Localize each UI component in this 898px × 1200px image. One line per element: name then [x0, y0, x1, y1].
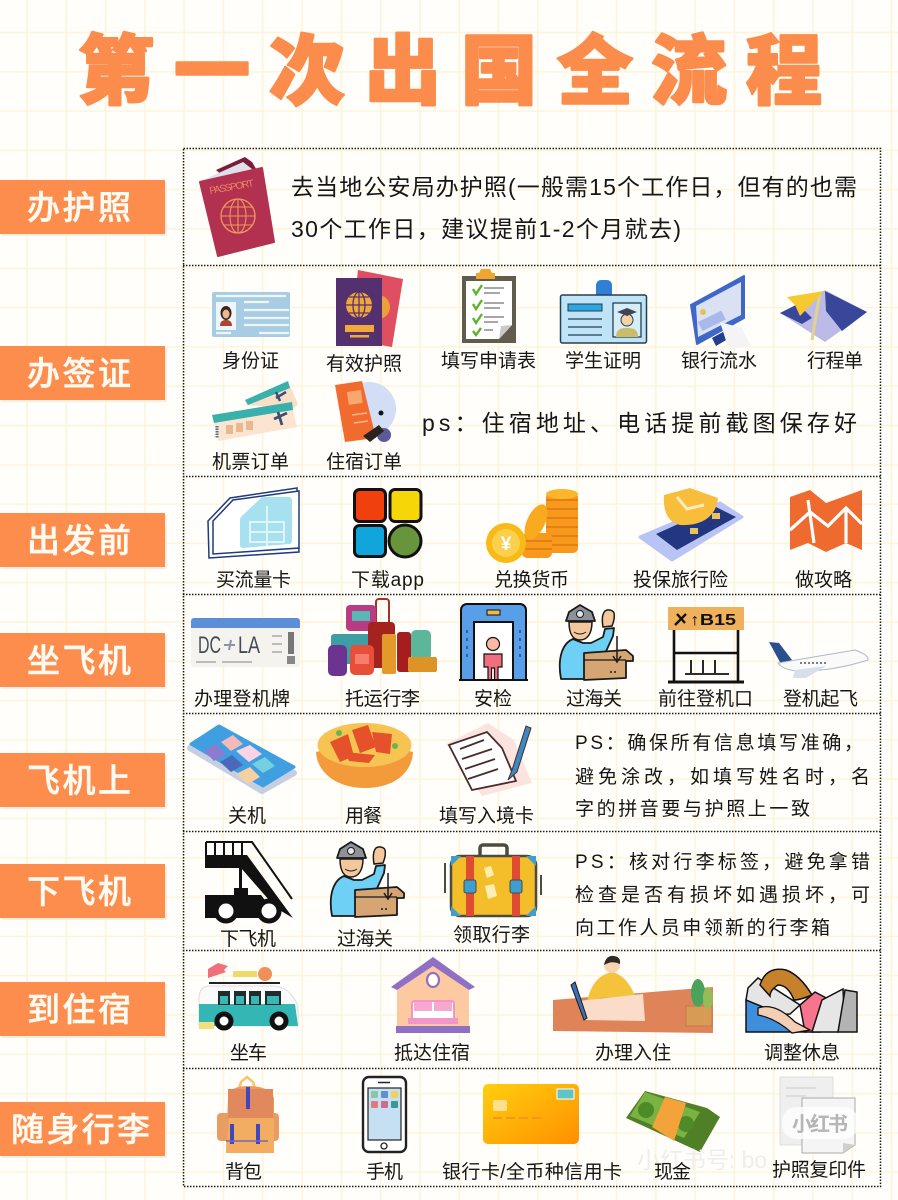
icon: flight tickets [212, 381, 298, 441]
text labels row six: 下飞机 [220, 928, 276, 950]
icon: meal bowl [316, 723, 413, 788]
text labels row four: 办理登机牌 [194, 688, 290, 710]
text labels row three: 下载app [351, 569, 424, 591]
text: PS note in-flight: 字的拼音要与护照上一致 [575, 798, 810, 820]
icon: bank statement monitor [691, 276, 750, 350]
text labels row seven: 调整休息 [764, 1042, 840, 1064]
text labels row eight: 背包 [225, 1161, 262, 1183]
text labels row three: 投保旅行险 [633, 569, 728, 591]
text: PS note in-flight: PS：确保所有信息填写准确， [575, 732, 863, 754]
label: 出发前 [0, 513, 167, 569]
label: 办护照 [0, 180, 167, 236]
label: 办签证: 办签证 [27, 355, 131, 392]
text: PS note in-flight [575, 732, 870, 820]
label: 下飞机: 下飞机 [27, 873, 131, 910]
label: 到住宿: 到住宿 [27, 991, 131, 1028]
label: 办护照: 办护照 [27, 189, 131, 226]
icon: backpack [217, 1077, 279, 1153]
panel frame: steps table [183, 148, 881, 1186]
panel: 出发前 [208, 488, 862, 591]
text labels row six [220, 924, 530, 950]
text labels row eight [225, 1159, 866, 1183]
icon: passport photocopies [780, 1077, 855, 1153]
icon: ID card [212, 292, 290, 337]
icon: coins: ¥ [501, 534, 512, 555]
panel: 办签证 [212, 269, 867, 473]
text labels row five: 填写入境卡 [439, 805, 534, 827]
icon: camper van [199, 963, 298, 1029]
text labels row four: 前往登机口 [658, 688, 753, 710]
panel: 飞机上 [190, 723, 870, 827]
text labels row one: 行程单 [807, 350, 863, 372]
text: ps note: ps：住宿地址、电话提前截图保存好 [422, 410, 857, 436]
label: 办签证 [0, 346, 167, 402]
icon: entry form [446, 723, 532, 796]
icon: bank card [483, 1084, 579, 1144]
icon: suitcase [445, 845, 541, 916]
text labels row six: 过海关 [337, 928, 393, 950]
icon: customs officer [560, 605, 633, 680]
text: PS note landing: PS：核对行李标签，避免拿错 [575, 850, 870, 873]
text labels row four [194, 688, 858, 710]
icon: checked luggage [328, 599, 437, 676]
icon: smartphone [363, 1077, 406, 1152]
text labels row eight: 手机 [366, 1161, 403, 1183]
text labels row five [228, 805, 534, 827]
text labels row four: 安检 [474, 688, 512, 710]
icon: valid passports [336, 270, 403, 347]
text: passport note: 去当地公安局办护照(一般需15个工作日，但有的也需 [291, 174, 857, 200]
icon: resting in bed [746, 969, 857, 1033]
panel: 随身行李 [217, 1077, 866, 1183]
label: 随身行李 [0, 1102, 167, 1158]
text labels row four: 托运行李 [345, 688, 420, 710]
icon: security gate [459, 604, 528, 680]
text labels row three: 买流量卡 [216, 569, 291, 591]
label: 下飞机 [0, 864, 167, 920]
icon: travel insurance [640, 488, 742, 560]
label: 出发前: 出发前 [27, 522, 131, 559]
icon: boarding pass: LA [238, 632, 260, 659]
label: 到住宿 [0, 982, 167, 1038]
icon: passport: PASSPORT [209, 178, 255, 197]
panel: 下飞机 [205, 842, 870, 950]
text labels row two: 住宿订单 [326, 451, 402, 473]
panel: 到住宿 [199, 956, 857, 1064]
text labels row one: 有效护照 [326, 353, 402, 375]
icon: phone off [190, 726, 294, 791]
text labels row one: 学生证明 [565, 350, 641, 372]
icon: lodging order [335, 381, 396, 442]
icon: guide map [790, 490, 862, 552]
text labels row one: 银行流水 [681, 350, 757, 372]
label: 坐飞机: 坐飞机 [27, 642, 131, 679]
text labels row seven [230, 1042, 840, 1064]
text labels row seven: 坐车 [230, 1042, 267, 1064]
icon: house [391, 957, 475, 1033]
text labels row two [212, 451, 402, 473]
icon: app grid [354, 490, 421, 557]
text: PS note landing [575, 850, 870, 939]
watermark logo: 小红书 [792, 1113, 848, 1136]
text labels row three [216, 569, 852, 591]
icon: plane [769, 642, 868, 678]
text: PS note in-flight: 避免涂改，如填写姓名时，名 [575, 766, 870, 788]
text: PS note landing: 检查是否有损坏如遇损坏，可 [575, 884, 870, 906]
watermark text: 小红书号: bo [637, 1147, 767, 1173]
label: 飞机上 [0, 753, 167, 809]
watermark logo [782, 1107, 858, 1139]
text labels row six: 领取行李 [453, 924, 530, 946]
icon: itinerary [780, 290, 867, 342]
title: 第一次出国全流程 [78, 30, 822, 115]
icon: boarding gate [668, 607, 744, 682]
label: 随身行李: 随身行李 [11, 1111, 150, 1148]
icon: boarding gate: ↑B15 [690, 612, 736, 629]
text labels row three: 做攻略 [795, 569, 852, 591]
label: 坐飞机 [0, 633, 167, 689]
text labels row two: 机票订单 [212, 451, 289, 473]
text labels row one: 身份证 [222, 350, 279, 372]
text labels row seven: 抵达住宿 [394, 1042, 470, 1064]
label: 飞机上: 飞机上 [27, 762, 131, 799]
icon: cash [626, 1091, 720, 1152]
icon: checking in at desk [553, 956, 713, 1033]
text labels row eight: 现金 [654, 1161, 691, 1183]
icon: passport [200, 157, 274, 256]
text labels row eight: 护照复印件 [772, 1159, 866, 1181]
panel: 坐飞机 [191, 599, 868, 710]
text: passport note: 30个工作日，建议提前1-2个月就去) [291, 216, 681, 242]
panel: 办护照 [200, 157, 857, 256]
icon: aircraft stairs [205, 842, 293, 921]
text: PS note landing: 向工作人员申领新的行李箱 [575, 917, 830, 939]
text labels row eight: 银行卡/全币种信用卡 [442, 1161, 622, 1183]
text labels row one [222, 350, 863, 375]
text labels row seven: 办理入住 [595, 1042, 671, 1064]
text labels row four: 过海关 [566, 688, 622, 710]
icon: boarding pass: DC [198, 632, 221, 659]
text labels row five: 关机 [228, 805, 266, 827]
icon: SIM card [208, 488, 299, 558]
text labels row three: 兑换货币 [494, 569, 569, 591]
icon: application form [462, 269, 516, 343]
icon: student card [560, 280, 646, 343]
icon: boarding pass [191, 618, 300, 667]
text labels row five: 用餐 [345, 805, 382, 827]
icon: coins [486, 489, 578, 563]
text labels row four: 登机起飞 [783, 688, 858, 710]
text labels row one: 填写申请表 [441, 350, 536, 372]
text: passport note [291, 174, 857, 242]
icon: customs officer [331, 842, 404, 917]
